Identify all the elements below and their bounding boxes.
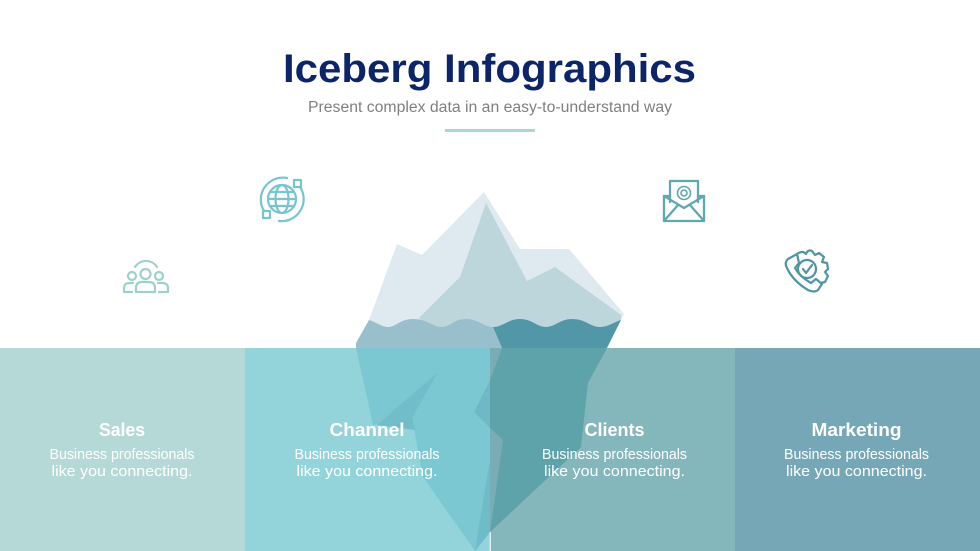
panel: clients background — [490, 348, 735, 551]
label: channel — [294, 419, 440, 480]
iceberg top: light face — [369, 192, 624, 331]
iceberg top: mid face — [419, 203, 621, 331]
label: clients: like you connecting. — [544, 464, 685, 480]
label: sales: Sales — [99, 419, 145, 440]
icon: envelope with at sign — [664, 181, 704, 221]
iceberg underwater: lower facet — [475, 460, 490, 551]
label: marketing — [784, 419, 929, 480]
label: channel: Business professionals — [294, 447, 440, 463]
iceberg waterline: left face — [356, 319, 502, 348]
iceberg underwater: facet left of seam — [474, 380, 490, 428]
title: Iceberg Infographics — [283, 47, 696, 91]
label: sales: Business professionals — [50, 447, 194, 463]
panel: sales background — [0, 348, 245, 551]
subtitle: Present complex data in an easy-to-understand way — [308, 99, 672, 116]
label: channel: like you connecting. — [296, 464, 438, 480]
label: sales: like you connecting. — [52, 464, 192, 480]
iceberg underwater: left body — [356, 348, 490, 551]
iceberg underwater: crack shadow — [377, 372, 438, 430]
label: marketing: like you connecting. — [786, 464, 927, 480]
label: channel: Channel — [330, 419, 404, 440]
icon: globe with orbit — [261, 178, 304, 221]
icon: people group — [124, 261, 168, 292]
panel: channel background — [245, 348, 490, 551]
label: clients: Clients — [584, 419, 644, 440]
title underline — [445, 129, 535, 132]
seam line — [490, 532, 491, 551]
iceberg underwater: right of seam — [490, 348, 503, 532]
label: clients — [542, 419, 687, 480]
iceberg waterline: right face — [493, 319, 621, 348]
iceberg — [356, 192, 624, 551]
panel: marketing background — [735, 348, 980, 551]
label: sales — [50, 419, 194, 480]
label: clients: Business professionals — [542, 447, 687, 463]
iceberg underwater: dark body — [490, 348, 607, 532]
icon: phone with gear and check — [786, 250, 828, 292]
label: marketing: Business professionals — [784, 447, 929, 463]
label: marketing: Marketing — [812, 419, 902, 440]
